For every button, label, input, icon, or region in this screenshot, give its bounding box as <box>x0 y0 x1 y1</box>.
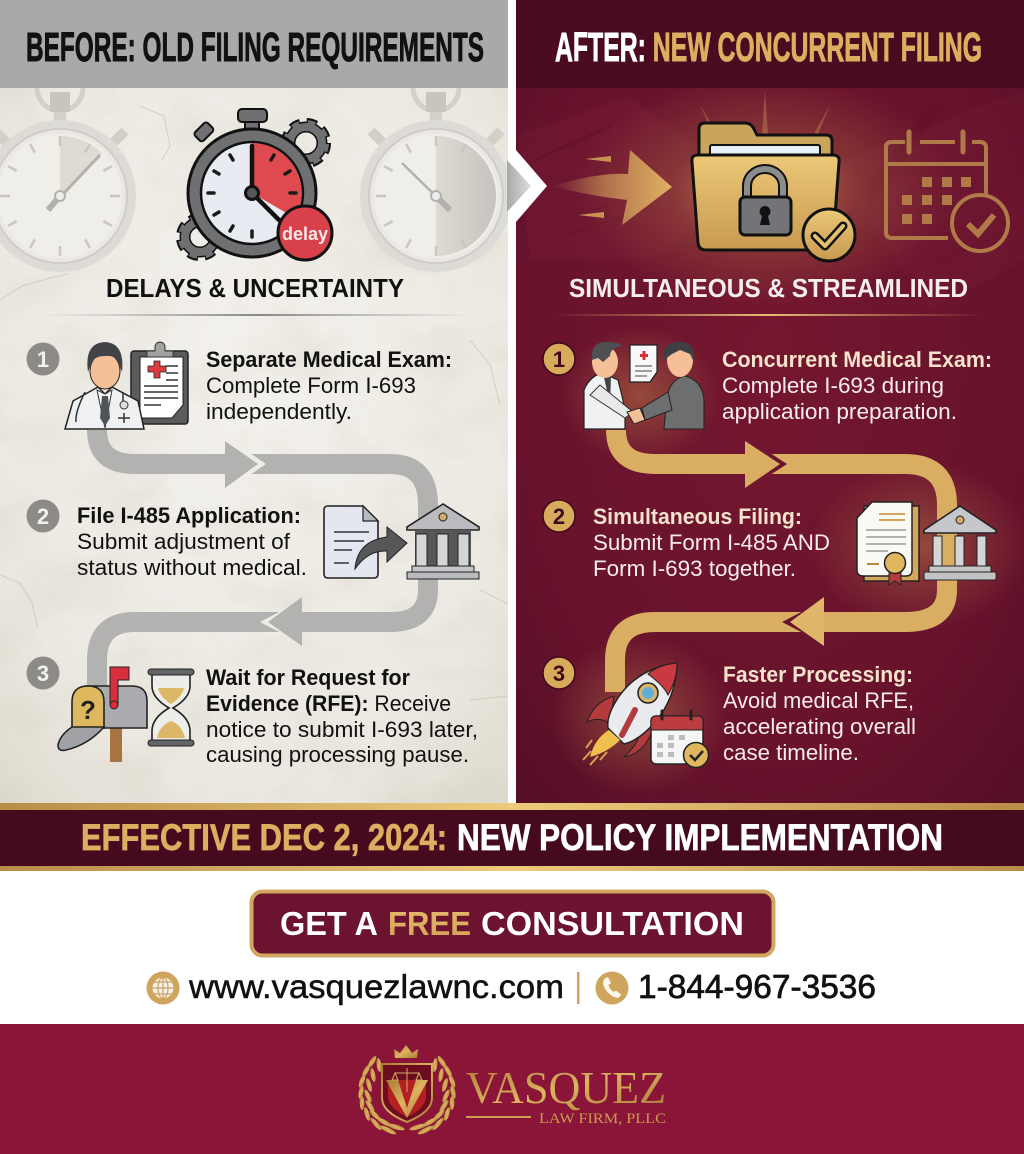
icon: courthouse <box>924 506 996 580</box>
step 1: after <box>543 342 992 429</box>
step 1: before <box>26 342 452 429</box>
logo: wordmark: VASQUEZ <box>466 1062 666 1113</box>
text: step 3 before <box>206 665 478 767</box>
icon: doctor and clipboard <box>65 342 188 429</box>
number 2 <box>543 500 575 532</box>
step 2: after <box>543 500 996 585</box>
number 3 <box>26 656 60 690</box>
number 1 <box>26 342 60 376</box>
text: step 3 before: notice to submit I-693 later, <box>206 717 478 742</box>
number 1: 1 <box>553 347 565 372</box>
text: website: www.vasquezlawnc.com <box>188 968 564 1005</box>
icon: phone <box>596 972 628 1004</box>
button: free consultation: GET A <box>280 905 378 942</box>
number 1 <box>543 343 575 375</box>
text: step 2 after: Form I-693 together. <box>593 556 796 581</box>
crown <box>394 1045 418 1058</box>
arrow: before to after chevron <box>507 150 547 222</box>
white call to action area <box>0 871 1024 1024</box>
button: free consultation: FREE <box>388 905 471 942</box>
logo: wordmark: LAW FIRM, PLLC <box>539 1111 666 1127</box>
panel: before <box>0 88 508 803</box>
icon: document sent <box>324 506 407 578</box>
icon: delay stopwatch: delay <box>282 224 328 244</box>
number 3 <box>543 657 575 689</box>
icon: certificate <box>857 502 919 585</box>
icon: globe <box>146 972 180 1004</box>
text: step 1 before <box>206 347 452 424</box>
text: step 3 after: case timeline. <box>723 740 859 765</box>
text: step 1 after: application preparation. <box>722 399 957 424</box>
text: step 3 after: accelerating overall <box>723 714 916 739</box>
divider between panels <box>508 0 516 804</box>
icon: mailbox <box>58 667 147 762</box>
icon: speed arrow <box>552 150 672 225</box>
decorative stopwatch right <box>360 88 508 272</box>
text: step 1 before: Separate Medical Exam: <box>206 347 452 372</box>
number 2: 2 <box>553 504 565 529</box>
arrow: before flow path <box>97 430 428 692</box>
contact line <box>146 968 876 1005</box>
icon: doctor and patient handshake <box>584 342 704 429</box>
text: step 3 before: Evidence (RFE): Receive <box>206 691 451 716</box>
banner: effective date <box>0 803 1024 871</box>
icon: calendar with check <box>886 132 1008 251</box>
text: step 2 before: Submit adjustment of <box>77 529 291 554</box>
text: step 3 after: Faster Processing: <box>723 662 913 687</box>
banner: effective date: NEW POLICY IMPLEMENTATION <box>457 817 943 858</box>
text: step 3 before: Wait for Request for <box>206 665 410 690</box>
text: step 2 before <box>77 503 307 580</box>
background documents <box>518 90 1024 310</box>
number 1: 1 <box>37 347 49 372</box>
footer <box>0 1024 1024 1154</box>
text: step 3 after: Avoid medical RFE, <box>723 688 914 713</box>
step 3: after <box>543 657 916 768</box>
icon: courthouse <box>407 504 479 579</box>
text: step 2 before: status without medical. <box>77 555 307 580</box>
button: free consultation: CONSULTATION <box>481 905 744 942</box>
icon: hourglass <box>148 669 194 746</box>
text: step 1 before: Complete Form I-693 <box>206 373 416 398</box>
text: step 1 after: Complete I-693 during <box>722 373 944 398</box>
text: step 2 after: Simultaneous Filing: <box>593 504 802 529</box>
text: step 2 after: Submit Form I-485 AND <box>593 530 830 555</box>
number 3: 3 <box>37 661 49 686</box>
panel: after <box>516 88 1024 803</box>
text: step 1 after <box>722 347 992 424</box>
text: step 1 after: Concurrent Medical Exam: <box>722 347 992 372</box>
text: step 3 before: causing processing pause. <box>206 742 469 767</box>
number 2 <box>26 500 60 532</box>
button: free consultation <box>252 892 774 956</box>
step 3: before <box>26 656 478 767</box>
logo: laurel crest <box>357 1045 457 1136</box>
decorative stopwatch left <box>0 88 136 272</box>
banner: effective date: EFFECTIVE DEC 2, 2024: <box>81 817 447 858</box>
text: step 2 after <box>593 504 830 581</box>
text: step 2 before: File I-485 Application: <box>77 503 301 528</box>
heading: simultaneous and streamlined: SIMULTANEOUS & STREAMLINED <box>569 273 968 303</box>
heading: delays and uncertainty: DELAYS & UNCERTAINTY <box>106 273 404 303</box>
header: before: BEFORE: OLD FILING REQUIREMENTS <box>26 24 484 70</box>
text: step 3 after <box>723 662 916 765</box>
step 2: before <box>26 500 479 580</box>
gears <box>182 124 325 255</box>
icon: locked folder <box>692 123 855 261</box>
number 2: 2 <box>37 504 49 529</box>
icon: delay stopwatch <box>182 109 332 260</box>
icon: rocket <box>583 663 677 765</box>
number 3: 3 <box>553 661 565 686</box>
text: phone number: 1-844-967-3536 <box>638 968 876 1005</box>
icon: calendar with check <box>651 711 708 768</box>
arrow: after flow path <box>615 430 947 692</box>
header: before <box>0 0 508 88</box>
icon: mailbox: ? <box>80 695 96 725</box>
text: step 1 before: independently. <box>206 399 352 424</box>
header: after <box>516 0 1024 88</box>
